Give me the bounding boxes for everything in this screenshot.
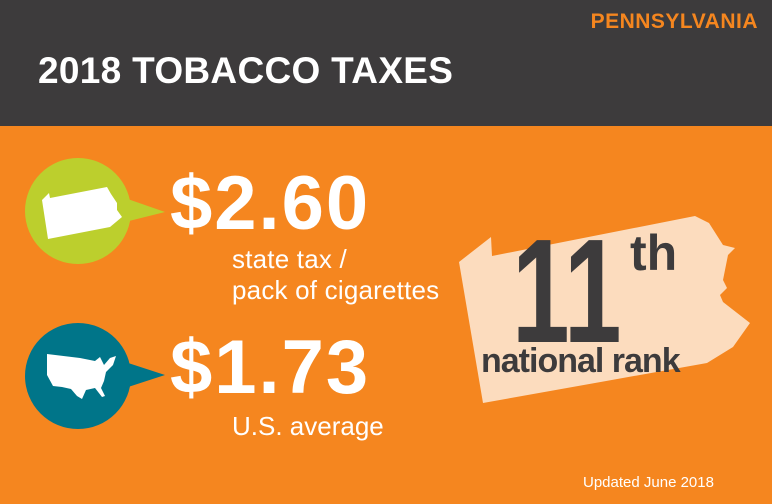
PA map shape <box>459 216 750 403</box>
rank: 11 <box>512 209 622 374</box>
icon: PA state green bubble <box>25 158 165 264</box>
footer note: Updated June 2018 <box>583 474 714 491</box>
state tax label: state tax / <box>232 244 347 274</box>
state label: PENNSYLVANIA <box>591 10 758 33</box>
state tax label: pack of cigarettes <box>232 275 439 305</box>
rank label: national rank <box>481 342 680 380</box>
rank suffix: th <box>630 225 677 281</box>
title: 2018 TOBACCO TAXES <box>38 50 453 91</box>
icon: USA blue bubble <box>25 323 165 429</box>
state tax label <box>232 244 439 305</box>
US average value: $1.73 <box>170 325 370 410</box>
state tax value: $2.60 <box>170 161 370 246</box>
header band <box>0 0 772 126</box>
US average label: U.S. average <box>232 411 384 441</box>
